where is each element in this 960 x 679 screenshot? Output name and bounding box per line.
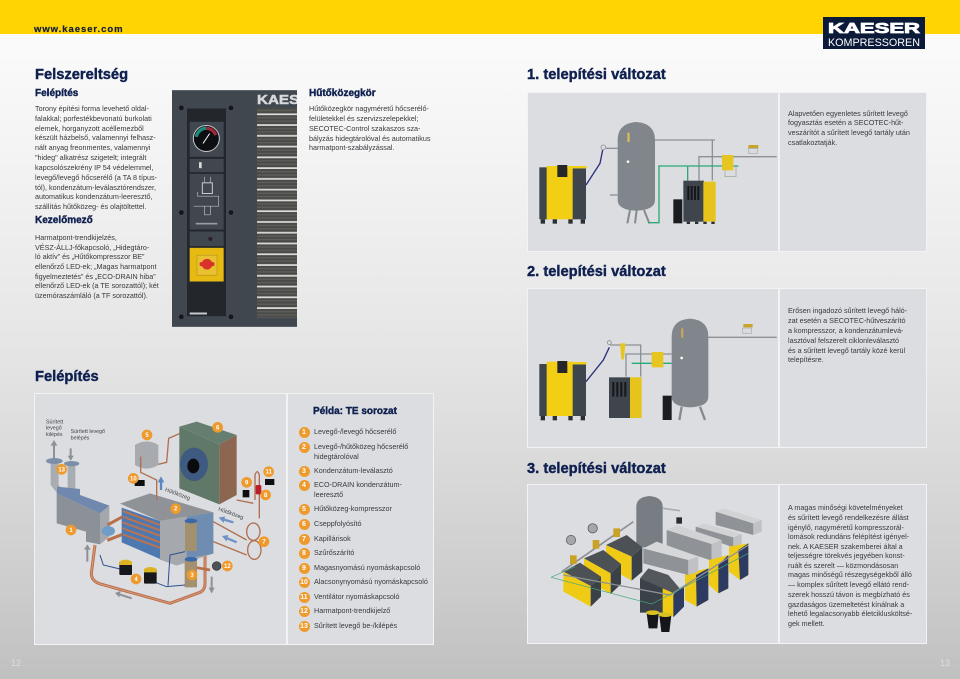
- text block: variant 3: magas minőségű részegységekből álló: [788, 570, 912, 579]
- legend: numbered parts: Harmatpont-trendkijelző: [314, 606, 390, 615]
- logo: KAESER KOMPRESSOREN: [823, 17, 925, 49]
- logo: KAESER KOMPRESSOREN: KOMPRESSOREN: [828, 37, 920, 49]
- legend: numbered parts: 10: [300, 579, 308, 586]
- large aftercooler: [643, 548, 688, 575]
- text block: construction: elemek, horganyzott acéllemezből: [35, 124, 144, 133]
- filter: [722, 155, 733, 170]
- text block: variant 2: és a sűrített levegő tartály közé kerül: [788, 346, 905, 355]
- text block: refrigerant circuit: bályzás hidegtárolóval és automatikus: [309, 134, 430, 143]
- dryer: [683, 181, 716, 224]
- text block: variant 3: igénylő, nagyméretű kompresszorál-: [788, 523, 904, 532]
- dryer: [609, 377, 642, 418]
- text block: variant 3: teljességre törekvés jegyében konst-: [788, 551, 905, 560]
- text block: variant 1: [788, 109, 910, 147]
- text block: construction: kapcsolószekrény IP 54 védelemmel,: [35, 163, 154, 172]
- capillary coils 7: [213, 472, 261, 559]
- condensate bins: [646, 610, 672, 632]
- air receiver tank: [636, 496, 663, 547]
- piping: [610, 140, 777, 195]
- text block: variant 2: telepítésre.: [788, 355, 824, 364]
- legend: numbered parts: 6: [302, 521, 306, 528]
- diagram: refrigeration dryer cutaway: 4: [134, 577, 138, 583]
- diagram: refrigeration dryer cutaway: 2: [174, 507, 178, 513]
- hose: [586, 150, 603, 185]
- subheading: Felépítés: Felépítés: [35, 88, 78, 99]
- heading: Felszereltség: Felszereltség: [35, 67, 128, 83]
- fan discs: [566, 535, 576, 545]
- refrigerant labels: Hűtőközeg: [217, 507, 244, 521]
- text block: control panel: VÉSZ-ÁLLJ-főkapcsoló, „Hidegtáro-: [35, 243, 149, 252]
- diagram: variant 3 layout: [550, 496, 762, 632]
- filter units: [570, 528, 620, 564]
- text block: variant 3: lomások redundáns felépítést igényel-: [788, 532, 909, 541]
- text block: construction: "hideg" alkatrész szigetelt; integrált: [35, 153, 146, 162]
- legend: numbered parts: hidegtárolóval: [314, 452, 359, 461]
- legend: numbered parts: 12: [300, 608, 308, 615]
- text block: variant 2: zat esetén a SECOTEC-hűtveszárító: [788, 316, 905, 325]
- ECO-DRAIN units 4: [119, 562, 132, 575]
- legend: numbered parts: Magasnyomású nyomáskapcsoló: [314, 563, 420, 572]
- diagram: refrigeration dryer cutaway: [46, 419, 274, 605]
- hose: [586, 347, 609, 382]
- text block: variant 3: A magas minőségi követelményeket: [788, 503, 903, 512]
- text block: variant 2: lasztóval felszerelt ciklonleválasztó: [788, 336, 899, 345]
- numbered callouts: [56, 422, 274, 584]
- aftercooler boxes: [667, 508, 762, 561]
- text block: variant 3: — komplex sűrített levegő ellátó rend-: [788, 580, 909, 589]
- legend: numbered parts: 5: [302, 506, 306, 513]
- text block: construction: szállítás hűtőközeg- és olajtöltettel.: [35, 202, 146, 211]
- legend: numbered parts: Kapillárisok: [314, 534, 351, 543]
- inlet and outlet labels: belépés: [71, 436, 90, 442]
- text block: control panel: ló aktív” és „Hűtőkompresszor BE”: [35, 252, 144, 261]
- text block: refrigerant circuit: Hűtőközegkör nagyméretű hőcserélő-: [309, 104, 429, 113]
- blue drain lines: [100, 552, 185, 587]
- text block: variant 3: szerek hosszú távon is megbízható és: [788, 590, 910, 599]
- refrigerant labels: Hűtőközeg: [164, 487, 191, 502]
- pressure gauge unit: [748, 145, 758, 148]
- heading: installation variant 1: 1. telepítési változat: [527, 67, 666, 83]
- panel: installation variant 3: [527, 484, 927, 644]
- text block: control panel: figyelmeztetés” és „ECO-DRAIN hiba”: [35, 272, 156, 281]
- text block: construction: levegő/levegő hőcserélő (a TA 8 típus-: [35, 173, 157, 182]
- panel: installation variant 1: [527, 92, 927, 252]
- legend: numbered parts: ECO-DRAIN kondenzátum-: [314, 480, 402, 489]
- diagram: refrigeration dryer cutaway: 12: [224, 564, 231, 570]
- heading: installation variant 3: 3. telepítési változat: [527, 461, 666, 477]
- legend: numbered parts: [299, 427, 428, 632]
- text block: construction: [35, 104, 157, 211]
- text block: variant 1: veszárítót a sűrített levegő tartály után: [788, 128, 910, 137]
- subheading: Hűtőközegkör: Hűtőközegkör: [309, 88, 376, 99]
- central dryer: [640, 568, 684, 617]
- text block: construction: automatikus kondenzátum-leeresztő,: [35, 192, 152, 201]
- text block: variant 2: Erősen ingadozó sűrített levegő háló-: [788, 306, 907, 315]
- pressure gauge unit: [743, 324, 753, 327]
- text block: construction: falakkal; porfestékbevonatú burkolati: [35, 114, 152, 123]
- text block: variant 3: lehető legalacsonyabb életciklusköltsé-: [788, 609, 912, 618]
- diagram: refrigeration dryer cutaway: 6: [216, 425, 220, 431]
- text block: control panel: ellenőrző LED-ek (a TE sorozattól); két: [35, 281, 159, 290]
- legend: numbered parts: Szűrőszárító: [314, 548, 354, 557]
- page number right: 13: [940, 658, 950, 668]
- air receiver tank: [672, 319, 708, 420]
- heat exchanger 2: [122, 508, 160, 559]
- legend: numbered parts: Alacsonynyomású nyomáskapcsoló: [314, 577, 428, 586]
- website address: www.kaeser.com: [34, 24, 124, 35]
- filter: [652, 352, 663, 367]
- compressed air pipes: [51, 463, 65, 493]
- grey air arrows: [54, 444, 212, 598]
- legend: numbered parts: 1: [302, 429, 306, 436]
- piping to tank: [663, 508, 680, 511]
- copper connecting pipes: [91, 517, 205, 603]
- text block: construction: nált anyag freonmentes, valamennyi: [35, 143, 150, 152]
- text block: variant 3: nek. A KAESER szakemberei által a: [788, 542, 903, 551]
- legend: numbered parts: 13: [300, 623, 308, 630]
- cyclone separator: [620, 343, 625, 359]
- condenser with fan 6: [179, 427, 219, 504]
- text block: control panel: ellenőrző LED-ek; „Magas harmatpont: [35, 262, 156, 271]
- diagram: refrigeration dryer cutaway: 11: [265, 470, 273, 476]
- text block: variant 3: [788, 503, 912, 628]
- text block: construction: Torony építési forma levehető oldal-: [35, 104, 149, 113]
- condensate drain: [673, 199, 682, 223]
- diagram: refrigeration dryer cutaway: 7: [262, 540, 266, 546]
- legend: numbered parts: 8: [302, 550, 306, 557]
- diagram: refrigeration dryer cutaway: 3: [190, 573, 194, 579]
- text block: variant 3: gek mellett.: [788, 619, 825, 628]
- text block: construction: tól), kondenzátum-leválasztórendszer,: [35, 183, 156, 192]
- filter dryer 8: [256, 485, 261, 494]
- subheading: Kezelőmező: Kezelőmező: [35, 215, 93, 226]
- legend: numbered parts: 7: [302, 536, 306, 543]
- right dryers and compressors: [685, 543, 748, 607]
- piping: [610, 337, 777, 377]
- yellow header band: [0, 0, 960, 34]
- condensate drain: [663, 396, 672, 420]
- diagram: refrigeration dryer cutaway: 13: [58, 467, 66, 473]
- text block: control panel: üzemóraszámláló (a TF sorozattól).: [35, 291, 148, 300]
- text block: refrigerant circuit: [309, 104, 430, 152]
- legend: numbered parts: Kondenzátum-leválasztó: [314, 466, 393, 475]
- text block: variant 2: a kompresszor, a kondenzátumlevá-: [788, 326, 903, 335]
- heading: installation variant 2: 2. telepítési változat: [527, 264, 666, 280]
- legend: numbered parts: 4: [302, 482, 306, 489]
- heading: Felépítés: Felépítés: [35, 369, 99, 385]
- legend: numbered parts: Ventilátor nyomáskapcsoló: [314, 592, 400, 601]
- diagram: variant 1 layout: [539, 122, 777, 224]
- text block: variant 2: [788, 306, 907, 364]
- diagram: refrigeration dryer cutaway: 5: [145, 433, 149, 439]
- legend: numbered parts: Levegő-/levegő hőcserélő: [314, 427, 396, 436]
- text block: variant 3: ruált és szerelt — közmondásosan: [788, 561, 898, 570]
- panel: installation variant 2: [527, 288, 927, 448]
- panel: construction diagram and legend: [34, 393, 434, 645]
- diagram: refrigeration dryer cutaway: 10: [130, 476, 137, 482]
- text block: variant 1: fogyasztás esetén a SECOTEC-hűt-: [788, 118, 903, 127]
- inlet and outlet labels: [46, 419, 105, 442]
- text block: refrigerant circuit: SECOTEC-Control szakaszos sza-: [309, 124, 420, 133]
- text block: variant 1: Alapvetően egyenletes sűrített levegő: [788, 109, 908, 118]
- logo: KAESER KOMPRESSOREN: KAESER: [828, 20, 920, 37]
- pipe loops: [563, 545, 748, 595]
- diagram: refrigeration dryer cutaway: 1: [69, 528, 73, 534]
- air to air heat exchanger 1: [57, 493, 100, 544]
- legend: numbered parts: 11: [300, 594, 308, 601]
- text block: variant 3: és sűrített levegő rendelkezésre állást: [788, 513, 909, 522]
- pressure switches: [243, 490, 249, 497]
- legend: numbered parts: 9: [302, 565, 306, 572]
- condensate separator 3: [185, 522, 197, 551]
- page number left: 12: [11, 658, 21, 668]
- legend: numbered parts: Cseppfolyósító: [314, 519, 362, 528]
- legend title: Példa: TE sorozat: [313, 406, 397, 417]
- dewpoint indicator 12: [212, 562, 221, 570]
- legend: numbered parts: Levegő-/hűtőközeg hőcserélő: [314, 442, 408, 451]
- text block: control panel: Harmatpont-trendkijelzés,: [35, 233, 117, 242]
- legend: numbered parts: Hűtőközeg-kompresszor: [314, 504, 392, 513]
- air receiver tank: [618, 122, 655, 223]
- inlet and outlet labels: Sürített levegő: [71, 429, 105, 435]
- compressor: [539, 165, 587, 224]
- photo: dryer control panel: [172, 90, 297, 327]
- inlet and outlet labels: levegő: [46, 425, 62, 431]
- legend: numbered parts: Sűrített levegő be-/kilépés: [314, 621, 397, 630]
- text block: refrigerant circuit: harmatpont-szabályzással.: [309, 143, 394, 152]
- text block: variant 1: csatlakoztatják.: [788, 138, 837, 147]
- diagram: refrigeration dryer cutaway: 8: [264, 493, 268, 499]
- legend: numbered parts: 3: [302, 468, 306, 475]
- left compressors: [563, 535, 642, 607]
- diagram: variant 2 layout: [539, 318, 777, 420]
- legend: numbered parts: leeresztő: [314, 490, 343, 499]
- diagram: refrigeration dryer cutaway: 9: [245, 480, 249, 486]
- text block: construction: készült házbelső, valamennyi felhasz-: [35, 133, 156, 142]
- text block: control panel: [35, 233, 159, 300]
- text block: refrigerant circuit: felületekkel és szervizszelepekkel;: [309, 114, 418, 123]
- compressor: [539, 361, 587, 420]
- small control box: [676, 517, 682, 524]
- compressor 5: [135, 441, 158, 469]
- inlet and outlet labels: Sürített: [46, 419, 64, 425]
- inlet and outlet labels: kilépés: [46, 432, 63, 438]
- refrigerant labels: [164, 487, 244, 521]
- text block: variant 3: gazdaságos üzemeltetést kínálnak a: [788, 600, 904, 609]
- legend: numbered parts: 2: [302, 444, 306, 451]
- blue refrigerant arrows: [158, 481, 164, 490]
